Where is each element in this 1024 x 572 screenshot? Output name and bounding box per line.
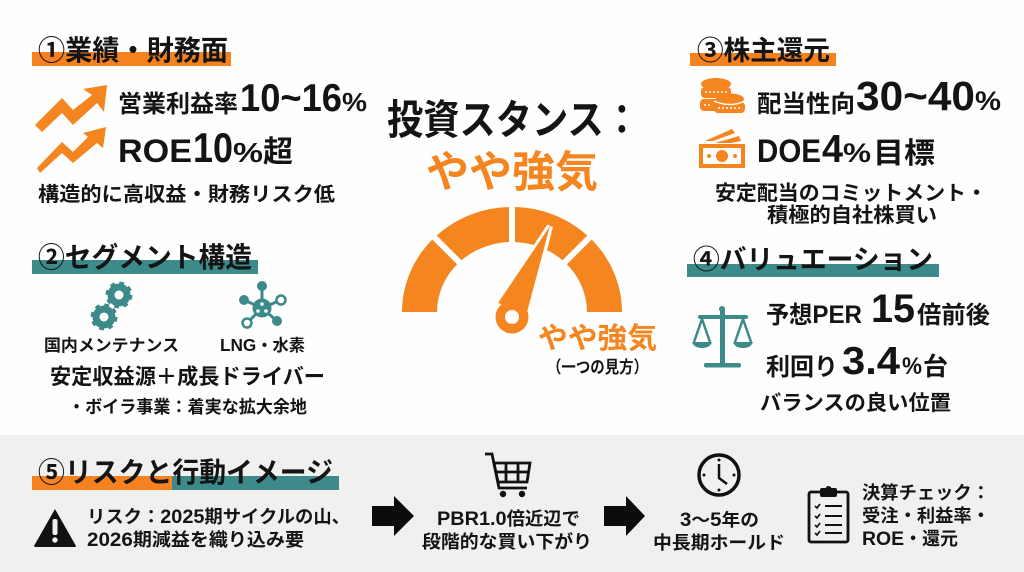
icon: shopping cart [485, 454, 530, 497]
metric: operating margin [118, 77, 367, 120]
label: domestic maintenance: 国内メンテナンス [44, 336, 179, 355]
action text: long-term hold: 3～5年の [680, 510, 759, 531]
panel: investment stance [387, 97, 657, 377]
metric: DOE: 目標 [873, 137, 935, 170]
metric: ROE: 超 [263, 136, 293, 169]
icon: molecule network [239, 281, 286, 328]
summary text: 安定収益源＋成長ドライバー [50, 365, 325, 389]
metric: payout ratio: 配当性向 [757, 91, 855, 118]
summary text [715, 182, 987, 227]
icon: clipboard [809, 486, 848, 542]
metric: operating margin: % [342, 87, 367, 117]
summary text: 積極的自社株買い [767, 204, 937, 227]
icon: banknotes [699, 129, 745, 168]
action text: gradual buying: PBR1.0倍近辺で [437, 508, 580, 530]
panel: valuation [687, 245, 990, 415]
metric: dividend yield: 利回り [766, 354, 838, 381]
icon: balance scale [692, 306, 753, 368]
metric: forward PER: 15 [871, 287, 915, 331]
metric: DOE: 4 [822, 128, 843, 171]
metric: DOE [757, 128, 935, 171]
heading: section 4: ④バリュエーション [693, 245, 933, 275]
summary text: 構造的に高収益・財務リスク低 [38, 183, 335, 206]
metric: payout ratio: 30~40 [856, 73, 975, 119]
icon: coins [700, 78, 745, 113]
arrow [372, 496, 414, 536]
note: boiler business: ・ボイラ事業：着実な拡大余地 [68, 397, 307, 417]
summary text: 安定配当のコミットメント・ [715, 182, 987, 205]
panel: segment structure [32, 241, 325, 417]
risk text: リスク：2025期サイクルの山、 [87, 506, 350, 528]
checklist text: 決算チェック： [862, 482, 990, 503]
icon: clock [699, 455, 739, 495]
risk text: 2026期減益を織り込み要 [87, 529, 304, 551]
metric: dividend yield [766, 340, 948, 383]
panel: risk and action [0, 435, 1024, 572]
gauge [402, 195, 622, 334]
arrow [604, 496, 645, 536]
title: 投資スタンス： [387, 97, 640, 143]
metric: ROE [118, 124, 293, 171]
metric: payout ratio: % [975, 86, 1001, 116]
metric: dividend yield: % [902, 353, 922, 380]
metric: payout ratio [757, 73, 1001, 119]
stance headline: やや強気 [426, 149, 598, 197]
heading: section 3: ③株主還元 [697, 36, 830, 66]
metric: ROE: 10 [193, 124, 233, 171]
action text: long-term hold: 中長期ホールド [653, 533, 785, 553]
panel: shareholder returns [690, 36, 1001, 227]
metric: ROE: % [233, 137, 263, 168]
metric: DOE: DOE [757, 133, 821, 169]
metric: dividend yield: 台 [923, 353, 948, 381]
metric: forward PER: 予想PER [766, 301, 862, 329]
action text: long-term hold [653, 510, 785, 553]
metric: dividend yield: 3.4 [842, 340, 900, 383]
metric: forward PER [766, 287, 990, 331]
needle [496, 226, 550, 334]
checklist text: ROE・還元 [862, 528, 958, 550]
heading: section 2: ②セグメント構造 [38, 241, 252, 273]
panel: performance and finance [32, 35, 367, 206]
metric: ROE: ROE [118, 133, 192, 169]
checklist text: 受注・利益率・ [862, 505, 990, 526]
gauge caption: （一つの見方） [547, 357, 648, 377]
summary text: バランスの良い位置 [760, 392, 951, 415]
action text: gradual buying: 段階的な買い下がり [422, 531, 592, 552]
heading: section 5: ⑤リスクと行動イメージ [38, 457, 333, 488]
metric: operating margin: 10~16 [240, 77, 342, 120]
icon: warning [34, 509, 76, 547]
metric: DOE: % [843, 138, 871, 168]
icon: gears [92, 284, 130, 328]
metric: forward PER: 倍前後 [917, 302, 990, 329]
metric: operating margin: 営業利益率 [118, 91, 238, 118]
checklist text [862, 482, 990, 550]
gauge label: やや強気 [538, 322, 657, 355]
risk text [87, 506, 350, 551]
icon: rising arrows [35, 85, 107, 173]
label: LNG and hydrogen: LNG・水素 [220, 335, 305, 355]
action text: gradual buying [422, 508, 592, 552]
heading: section 1: ①業績・財務面 [38, 35, 228, 66]
